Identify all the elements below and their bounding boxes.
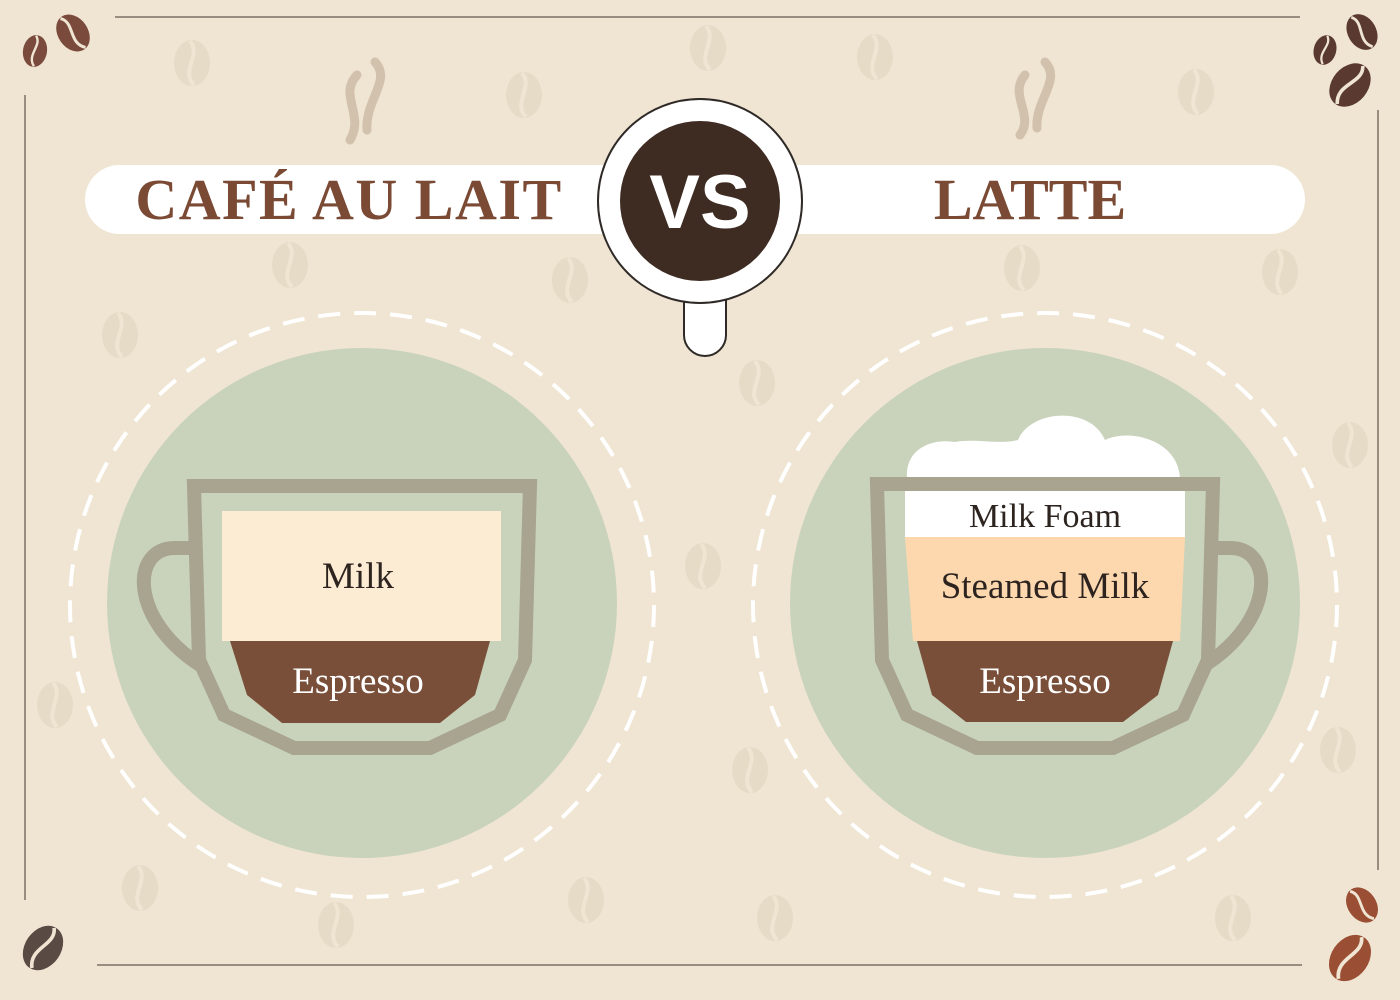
foam layer [905,478,1185,537]
panel: latte [753,313,1337,897]
icon: corner beans top-left [20,8,97,69]
icon: steam left [350,62,381,140]
espresso layer [230,641,490,723]
cup handle [144,548,200,665]
icon: corner bean bottom-left [14,918,72,978]
panel: cafe au lait: Espresso [292,661,424,702]
heading: latte: LATTE [934,167,1126,232]
icon: corner beans bottom-right [1320,881,1385,989]
heading: cafe au lait: CAFÉ AU LAIT [135,167,563,232]
icon: VS cup [598,99,802,356]
icon: VS cup: VS [649,160,751,245]
panel: latte: Milk Foam [969,498,1121,535]
panel: cafe au lait: Milk [322,556,394,597]
panel: latte: Steamed Milk [941,566,1150,607]
icon: steam right [1019,62,1051,135]
milk foam cloud [907,416,1180,478]
icon: corner beans top-right [1310,8,1384,115]
steamed milk layer [905,537,1185,641]
milk layer [222,511,501,641]
cup outline [194,486,530,748]
espresso layer [917,641,1173,722]
cup handle [1205,548,1261,665]
cup outline [877,484,1213,748]
panel: latte: Espresso [979,661,1111,702]
title bar [85,165,1305,234]
panel: cafe au lait [70,313,654,897]
